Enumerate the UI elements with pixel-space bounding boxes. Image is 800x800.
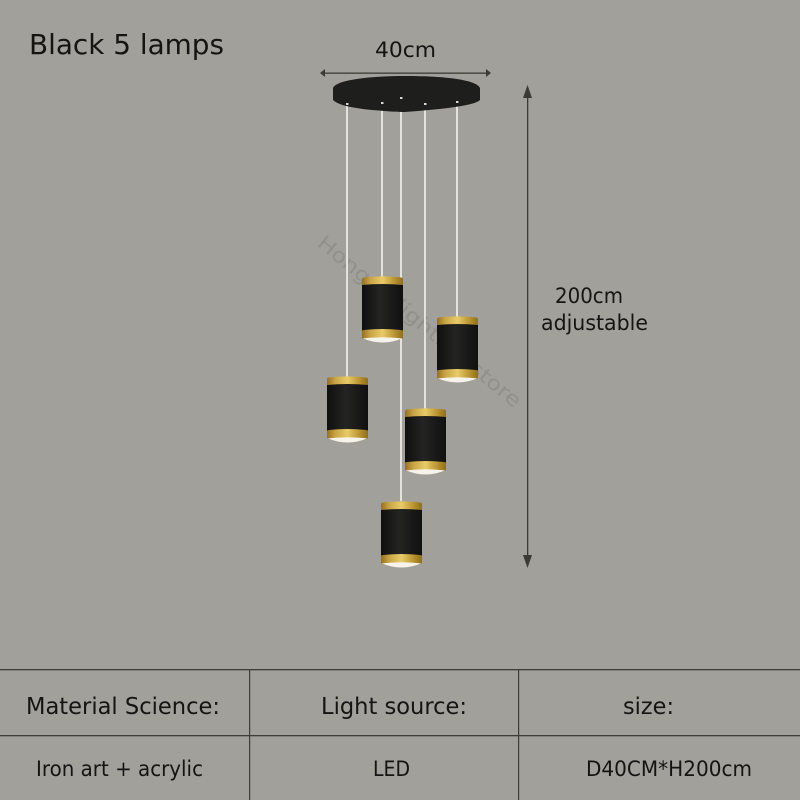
title: Black 5 lamps — [29, 28, 224, 61]
value: size: D40CM*H200cm — [586, 757, 752, 781]
specification table — [0, 669, 800, 800]
height dimension label — [541, 284, 648, 336]
width dimension label: 40cm — [375, 38, 436, 62]
lamp 1 — [362, 276, 403, 342]
header: light source: Light source: — [321, 694, 467, 720]
watermark: Hongda lighting store — [313, 230, 526, 412]
arrow: width dimension — [320, 69, 491, 77]
lamp 2 — [437, 316, 478, 382]
lamp 5 — [381, 501, 422, 568]
value: material: Iron art + acrylic — [36, 757, 203, 781]
lamp 4 — [405, 408, 446, 474]
pendant lamp fixture — [327, 76, 480, 568]
height dimension label: adjustable — [541, 311, 648, 336]
wire fixings — [346, 97, 458, 105]
lamp 3 — [327, 376, 368, 442]
header: material: Material Science: — [26, 694, 220, 720]
value: light source: LED — [373, 757, 410, 781]
height dimension label: 200cm — [555, 284, 623, 309]
wires — [346, 98, 458, 501]
arrow: height dimension — [523, 85, 532, 568]
ceiling canopy — [333, 76, 480, 112]
header: size: size: — [623, 694, 674, 720]
